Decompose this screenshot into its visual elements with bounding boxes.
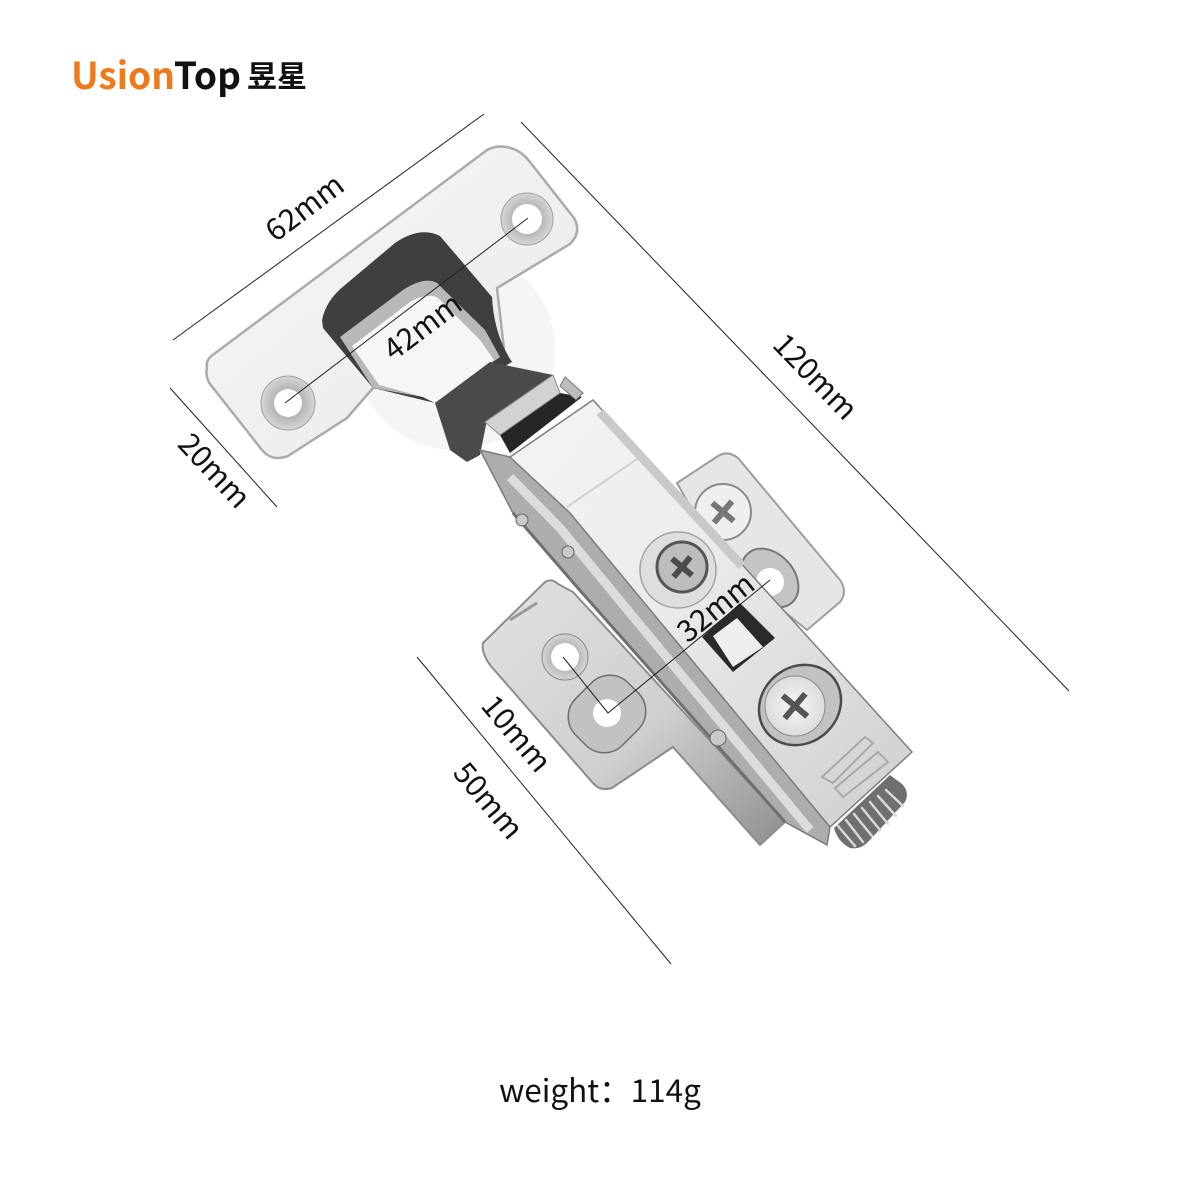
dimension labels	[170, 161, 870, 847]
spring	[834, 775, 907, 848]
grip ribs	[822, 737, 888, 797]
weight caption: weight：114g	[499, 1066, 701, 1112]
dark knuckle	[435, 362, 553, 462]
adjustment screw lower	[743, 648, 857, 762]
hinge arm side wall	[480, 450, 830, 845]
adjustment screw upper	[640, 532, 716, 608]
label 50mm: 50mm	[445, 751, 536, 847]
label 32mm: 32mm	[666, 561, 762, 651]
back mounting plate	[677, 453, 844, 630]
square window	[702, 603, 775, 672]
lower mounting plate	[483, 580, 785, 845]
dimension lines	[170, 114, 1069, 964]
cup plate	[206, 146, 577, 458]
hinge arm top face	[485, 375, 912, 827]
label 120mm: 120mm	[765, 322, 870, 428]
label 42mm: 42mm	[372, 280, 470, 369]
logo: UsionTop	[71, 46, 241, 100]
label 10mm: 10mm	[473, 684, 564, 780]
label 20mm: 20mm	[170, 421, 263, 516]
cup disc	[355, 250, 555, 450]
hinge product photo	[206, 146, 912, 848]
roller and lip	[500, 393, 582, 453]
logo: 昱星	[247, 52, 307, 96]
label 62mm: 62mm	[254, 161, 352, 250]
